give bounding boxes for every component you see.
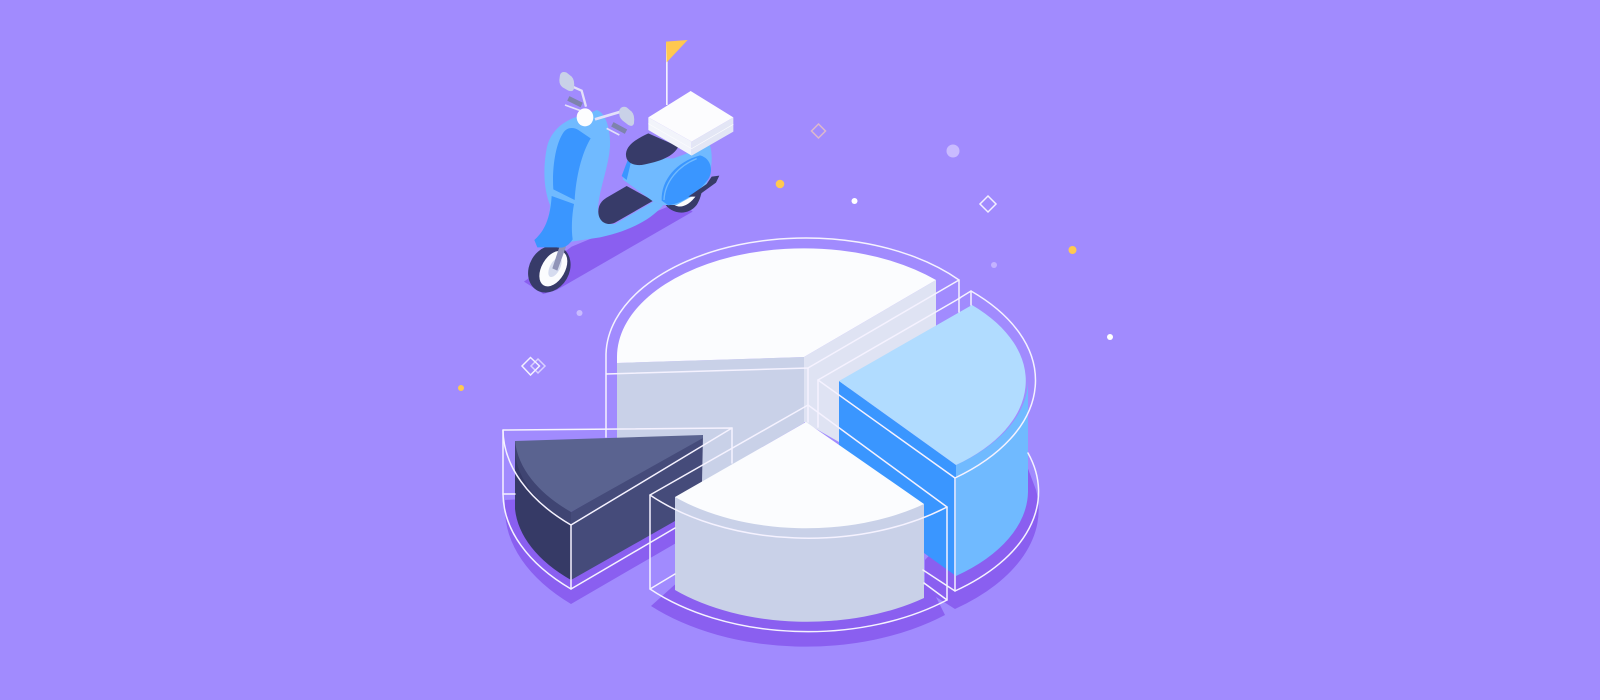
scooter rear fender	[662, 155, 711, 205]
delivery box	[648, 91, 733, 156]
scooter seat	[626, 133, 678, 165]
scooter floorboard	[598, 186, 653, 224]
wireframe outlines	[503, 238, 1039, 632]
shadow: blue slice	[925, 450, 1039, 609]
wireframe: navy slice	[503, 428, 732, 525]
scooter upper front panel	[553, 128, 591, 200]
wireframe: blue slice	[818, 291, 1035, 478]
scooter tail pipe	[688, 176, 719, 197]
scooter shadow	[524, 202, 693, 294]
scooter	[520, 40, 733, 300]
pie slice: large white	[617, 248, 936, 530]
scooter lower front panel	[534, 196, 574, 248]
flag	[666, 40, 688, 105]
scooter rear body	[623, 145, 712, 205]
ground shadows of pie chart	[505, 450, 1039, 647]
pie slice: navy	[515, 435, 703, 580]
handlebars and mirrors	[559, 72, 634, 135]
decorative dots and diamonds	[458, 124, 1113, 391]
front wheel	[520, 238, 579, 300]
shadow: navy slice	[505, 490, 690, 604]
pie slice: blue	[839, 305, 1028, 576]
rear wheel	[664, 187, 703, 213]
shadow: white slice	[651, 580, 945, 647]
pie slice: small white	[675, 422, 924, 622]
wireframe: large slice	[606, 238, 959, 437]
scooter body	[542, 110, 663, 243]
wireframe: white slice	[650, 405, 947, 538]
